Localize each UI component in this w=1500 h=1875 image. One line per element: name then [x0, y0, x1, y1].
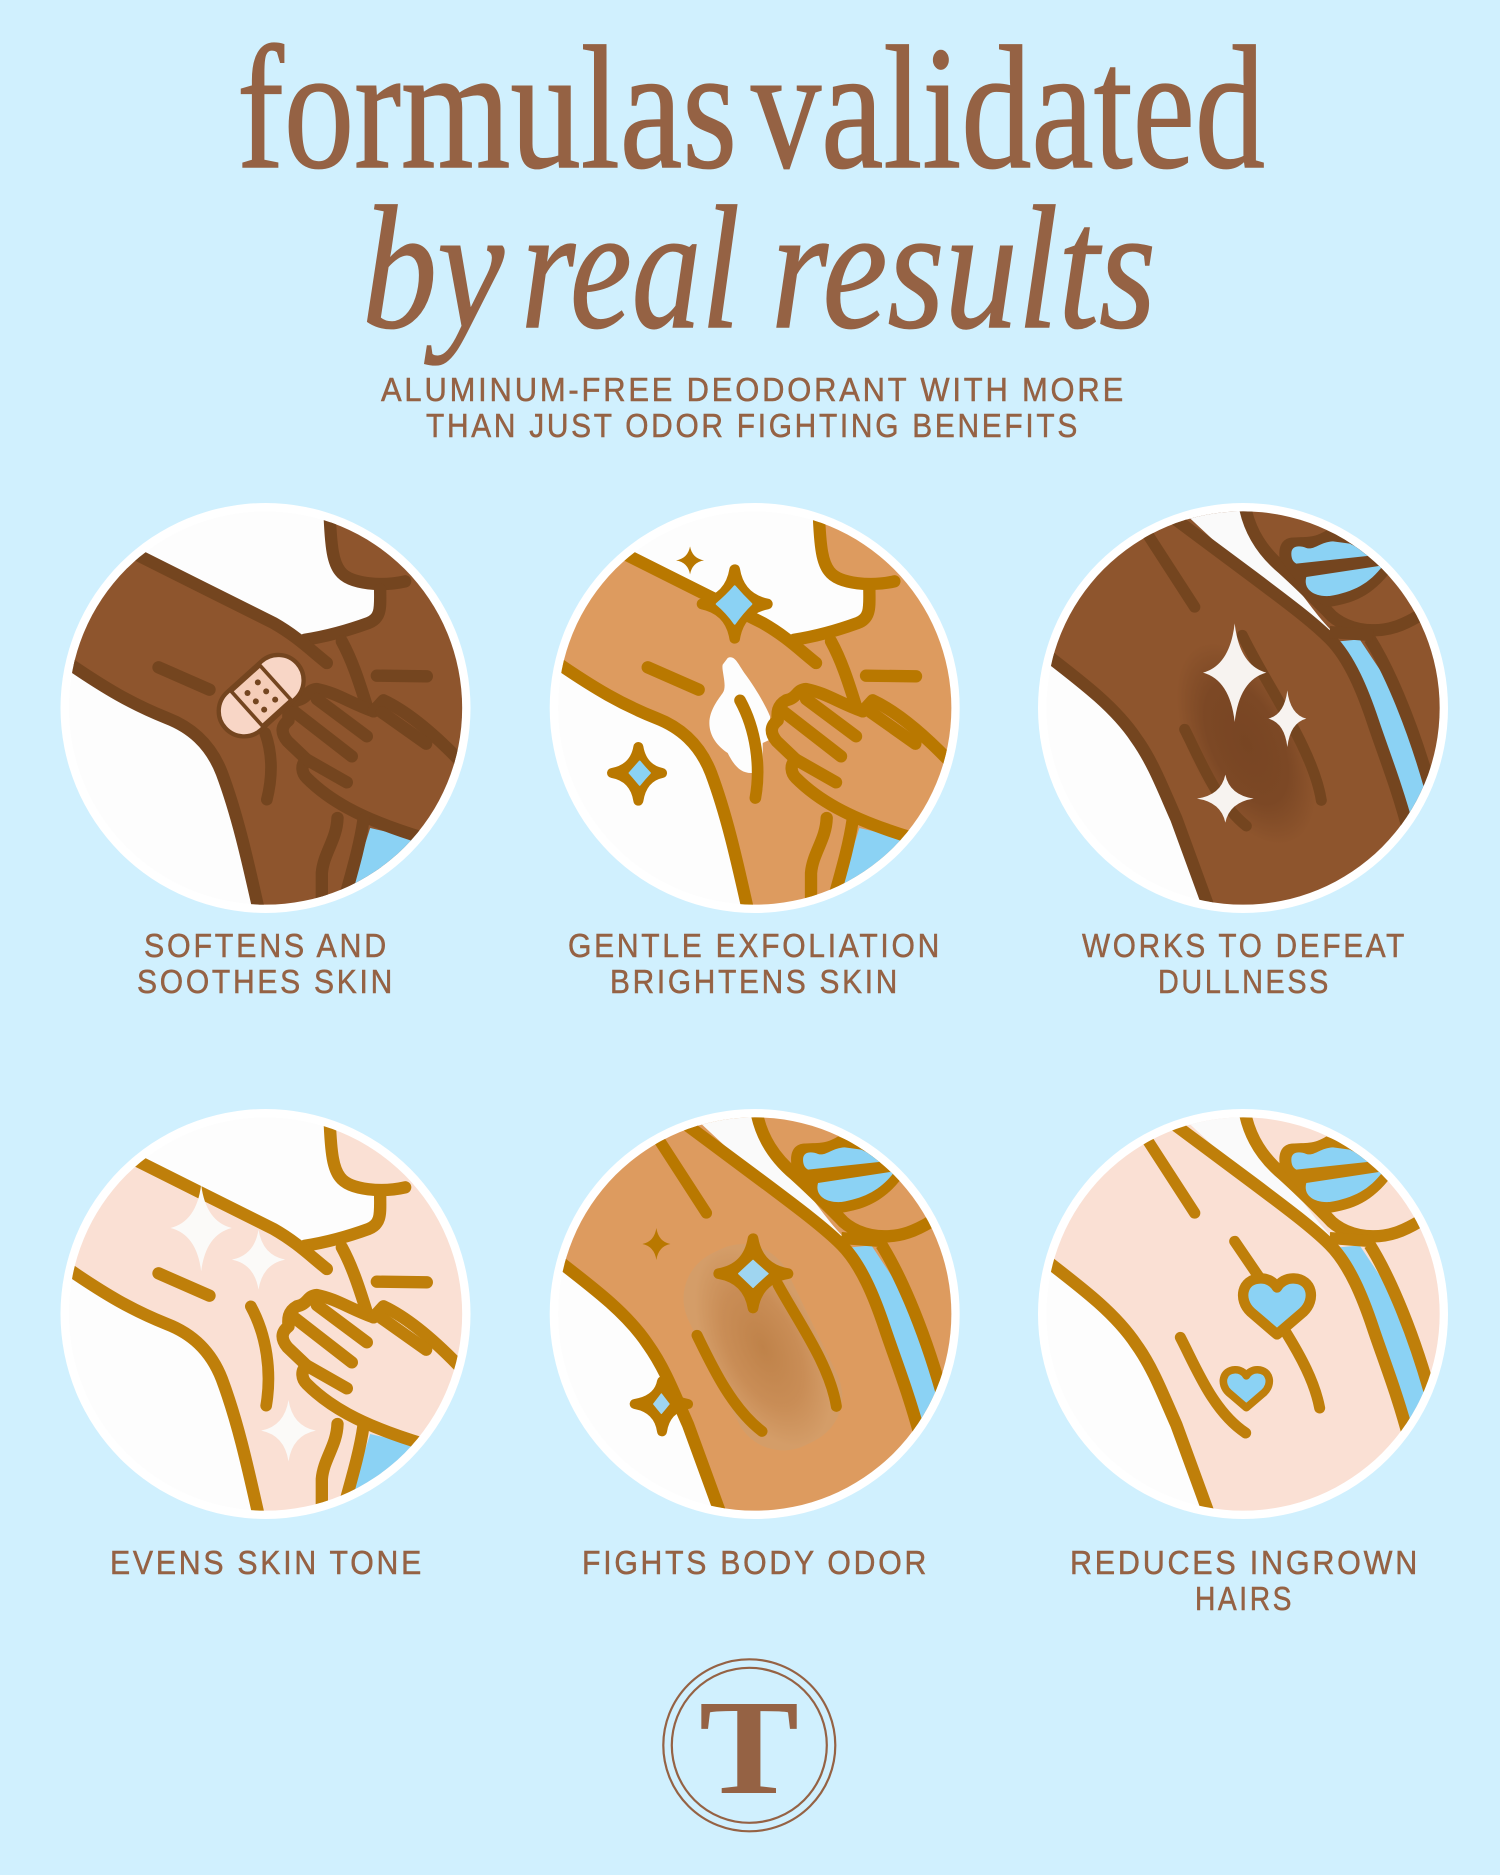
caption: REDUCES INGROWN [1070, 1544, 1420, 1581]
subtitle: ALUMINUM-FREE DEODORANT WITH MORE [381, 371, 1126, 408]
title: validated [751, 11, 1265, 206]
caption: WORKS TO DEFEAT [1082, 927, 1407, 964]
caption [1070, 1544, 1420, 1617]
title: by [362, 171, 505, 366]
icon: arm with bandage [60, 503, 470, 913]
caption [1082, 927, 1407, 1000]
caption: BRIGHTENS SKIN [610, 963, 900, 1000]
subtitle: THAN JUST ODOR FIGHTING BENEFITS [426, 407, 1080, 444]
logo: T monogram [663, 1659, 835, 1831]
panel: reduces ingrown hairs [1038, 1109, 1448, 1610]
subtitle [381, 371, 1126, 444]
icon: underarm with white sparkles [1038, 503, 1448, 913]
caption [137, 927, 395, 1000]
caption: SOOTHES SKIN [137, 963, 395, 1000]
panel: works to defeat dullness [1038, 503, 1448, 994]
title: real [521, 171, 740, 366]
panel: evens skin tone [60, 1109, 470, 1574]
title: results [771, 171, 1156, 366]
panel: fights body odor [550, 1109, 960, 1574]
caption: SOFTENS AND [144, 927, 389, 964]
caption [568, 927, 942, 1000]
title [237, 11, 1265, 366]
caption: GENTLE EXFOLIATION [568, 927, 942, 964]
panel: gentle exfoliation brightens skin [550, 503, 960, 994]
title: formulas [237, 11, 737, 206]
icon: underarm with outlined sparkles [550, 1109, 960, 1519]
caption: HAIRS [1195, 1580, 1294, 1617]
icon: arm with pale sparkles [60, 1109, 470, 1519]
caption: DULLNESS [1158, 963, 1331, 1000]
icon: underarm with hearts [1038, 1109, 1448, 1519]
panel: softens and soothes skin [60, 503, 470, 994]
icon: arm with foam and sparkles [550, 503, 960, 913]
logo: T monogram: T [699, 1673, 799, 1823]
caption: FIGHTS BODY ODOR [582, 1544, 929, 1581]
caption: EVENS SKIN TONE [110, 1544, 424, 1581]
